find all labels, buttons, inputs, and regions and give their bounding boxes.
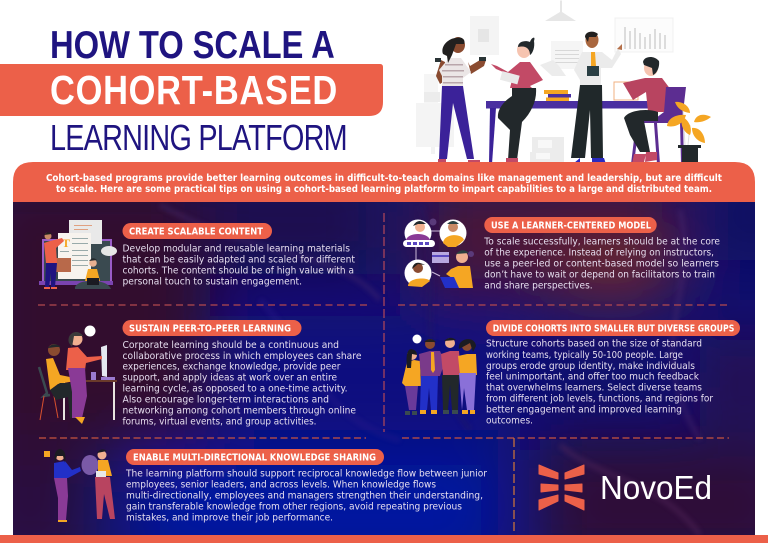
icon: diverse group of four people [402, 334, 477, 415]
body text: and share perspectives. [484, 280, 593, 291]
panel: divide cohorts into smaller but diverse groups [402, 320, 740, 427]
icon: content creators with document [39, 220, 117, 289]
icon: two people sharing knowledge [44, 449, 115, 522]
body text: To scale successfully, learners should be at the core [483, 237, 720, 248]
body text [483, 237, 720, 291]
body text: learning cycle, as opposed to a one-time activity. [122, 384, 348, 395]
potted plant [667, 102, 711, 164]
body text [125, 469, 487, 523]
person: seated man at laptop [614, 57, 686, 164]
body text: Develop modular and reusable learning materials [122, 244, 350, 254]
body text: that overwhelms learners. Select diverse teams [486, 383, 702, 394]
body text [122, 244, 355, 288]
heading pill: ENABLE MULTI-DIRECTIONAL KNOWLEDGE SHARING [133, 452, 376, 464]
icon: content creators with document: T [62, 236, 70, 250]
person: man with tie [568, 32, 622, 168]
books on table [544, 90, 571, 101]
body text: forums, virtual events, and group activities. [122, 417, 316, 428]
bottom orange strip [0, 535, 768, 543]
intro text: Cohort-based programs provide better learning outcomes in difficult-to-teach domains like management and leadership, but are difficult [46, 173, 723, 184]
body text: The learning platform should support reciprocal knowledge flow between junior [125, 469, 487, 480]
heading pill [122, 320, 302, 336]
body text: outcomes. [486, 416, 533, 427]
icon: connected learners with ratings [403, 218, 474, 288]
heading pill: SUSTAIN PEER-TO-PEER LEARNING [129, 324, 291, 334]
body text: feel unimportant, and offer too much feedback [486, 372, 700, 383]
title line: learning platform: LEARNING PLATFORM [50, 117, 348, 158]
panel: create scalable content [39, 220, 355, 289]
body text: personal touch to sustain engagement. [122, 276, 302, 288]
body text: don’t have to wait or depend on facilitators to train [484, 269, 715, 280]
body text: mistakes, and improve their job performance. [126, 512, 333, 523]
body text: that can be easily adapted and scaled for different [122, 254, 355, 266]
panel: enable multi-directional knowledge sharing [44, 449, 487, 523]
panel: use a learner-centered model [403, 217, 720, 291]
title banner: COHORT-BASED [50, 68, 337, 114]
body text: of the experience. Instead of relying on instructors, [484, 248, 714, 259]
icon: logo mark [539, 465, 584, 510]
logo: NovoEd [539, 465, 712, 510]
dark content panel background [13, 202, 755, 535]
body text: Also encourage longer-term interactions and [122, 394, 329, 405]
intro text [46, 173, 723, 195]
body text: better engagement and improved learning [486, 405, 682, 416]
heading pill [486, 320, 740, 336]
heading pill [484, 217, 657, 233]
body text: employees, senior leaders, and across levels. When knowledge flows [126, 479, 436, 490]
panel: sustain peer-to-peer learning [39, 320, 362, 428]
office background [416, 0, 673, 162]
body text: from different job levels, functions, and regions for [486, 394, 713, 405]
body text: Corporate learning should be a continuous and [122, 340, 339, 351]
dashed dividers [38, 213, 729, 531]
heading pill: USE A LEARNER-CENTERED MODEL [491, 220, 651, 232]
body text: experiences, exchange knowledge, provide peer [122, 362, 341, 373]
intro text: to scale. Here are some practical tips on using a cohort-based learning platform to impart capabilities to a large and distributed team. [56, 184, 712, 195]
body text: gain transferable knowledge from other regions, avoid repeating previous [126, 501, 462, 512]
illustration: team meeting around a table [416, 0, 711, 168]
person: woman with curly hair [435, 37, 486, 164]
body text [122, 340, 362, 428]
icon: two colleagues at a computer [39, 326, 117, 424]
body text: support, and apply ideas at work over an entire [122, 373, 337, 384]
intro band [13, 162, 755, 202]
person: woman with tablet [491, 38, 543, 163]
marble texture [160, 205, 700, 535]
heading pill [126, 449, 384, 465]
body text: cohorts. The content should be of high value with a [122, 266, 354, 276]
heading pill [122, 223, 272, 239]
body text: collaborative process in which employees can share [122, 351, 362, 362]
body text [486, 339, 713, 427]
body text: Structure cohorts based on the size of standard [486, 339, 702, 350]
title [0, 22, 383, 158]
title banner [0, 64, 383, 116]
title line: how to scale a: HOW TO SCALE A [50, 22, 335, 67]
body text: working teams, typically 50-100 people. Large [486, 350, 683, 361]
wordmark: NovoEd [600, 469, 712, 506]
body text: groups erode group identity, make individuals [486, 361, 695, 372]
body text: multi-directionally, employees and managers strengthen their understanding, [126, 490, 483, 501]
heading pill: CREATE SCALABLE CONTENT [129, 226, 264, 238]
body text: use a peer-led or content-based model so learners [484, 258, 719, 269]
body text: networking among cohort members through online [122, 406, 356, 417]
table [486, 101, 649, 164]
